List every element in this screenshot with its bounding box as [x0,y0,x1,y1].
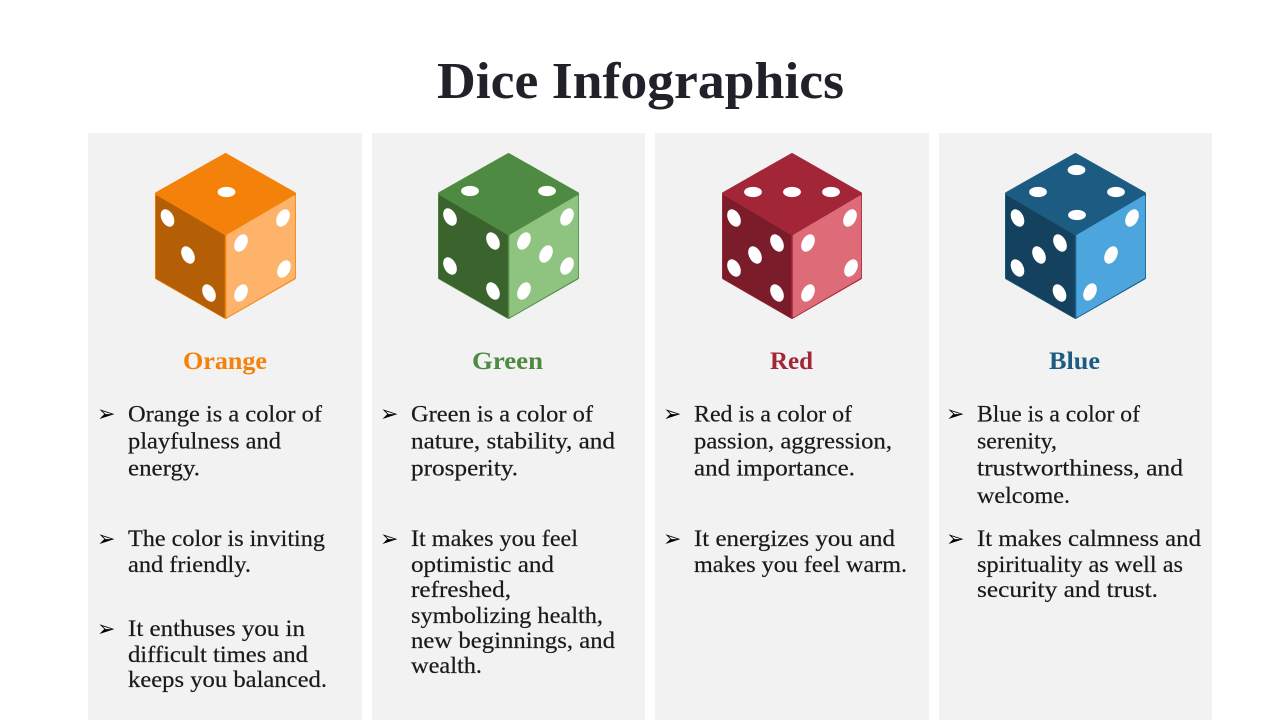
bullet list: green: It makes you feel [411,526,578,551]
bullet list: orange: ➢ [97,617,115,642]
bullet list: orange: keeps you balanced. [128,667,327,692]
heading: blue: Blue [1049,348,1100,375]
bullet list: green: ➢ [380,527,398,552]
bullet list: orange: It enthuses you in [128,616,306,641]
bullet list: red: It energizes you and [694,526,896,551]
panel: blue [939,133,1212,720]
heading: red: Red [770,348,813,375]
heading: green: Green [472,348,543,375]
panel: orange [88,133,362,720]
bullet list: orange: Orange is a color of [128,402,322,426]
bullet list: blue: trustworthiness, and [977,456,1184,480]
bullet list: blue: welcome. [977,483,1070,508]
bullet list: orange: difficult times and [128,642,309,667]
bullet list: red: makes you feel warm. [694,552,907,577]
bullet list: green [380,402,616,678]
bullet list: green: optimistic and [411,552,555,577]
bullet list: blue: spirituality as well as [977,552,1183,577]
bullet list: green: symbolizing health, [411,603,603,628]
icon: green die [440,154,578,318]
bullet list: orange: ➢ [97,527,115,552]
bullet list: orange: and friendly. [128,552,251,577]
bullet list: blue [946,402,1202,602]
bullet list: orange [97,402,327,692]
bullet list: orange: playfulness and [128,428,282,454]
bullet list: red: and importance. [694,456,855,480]
bullet list: orange: energy. [128,456,200,480]
bullet list: green: ➢ [380,402,398,427]
icon: red die [724,154,861,318]
bullet list: red: ➢ [663,527,681,552]
bullet list: orange: The color is inviting [128,526,326,551]
bullet list: red: Red is a color of [694,402,852,426]
bullet list: red [663,402,907,577]
panel: red [655,133,929,720]
bullet list: blue: ➢ [946,527,964,552]
bullet list: green: prosperity. [411,456,518,480]
bullet list: blue: Blue is a color of [977,402,1140,426]
bullet list: red: passion, aggression, [694,428,892,454]
bullet list: blue: ➢ [946,402,964,427]
heading: orange: Orange [183,348,267,375]
bullet list: green: refreshed, [411,577,511,602]
icon: blue die [1006,154,1144,318]
bullet list: blue: It makes calmness and [977,526,1202,551]
bullet list: green: Green is a color of [411,402,593,426]
bullet list: blue: serenity, [977,428,1057,454]
title: Dice Infographics [437,53,844,110]
bullet list: green: nature, stability, and [411,428,616,454]
bullet list: green: wealth. [411,653,482,678]
bullet list: blue: security and trust. [977,577,1158,602]
bullet list: green: new beginnings, and [411,628,616,653]
bullet list: orange: ➢ [97,402,115,427]
panel: green [372,133,645,720]
icon: orange die [156,154,294,318]
bullet list: red: ➢ [663,402,681,427]
